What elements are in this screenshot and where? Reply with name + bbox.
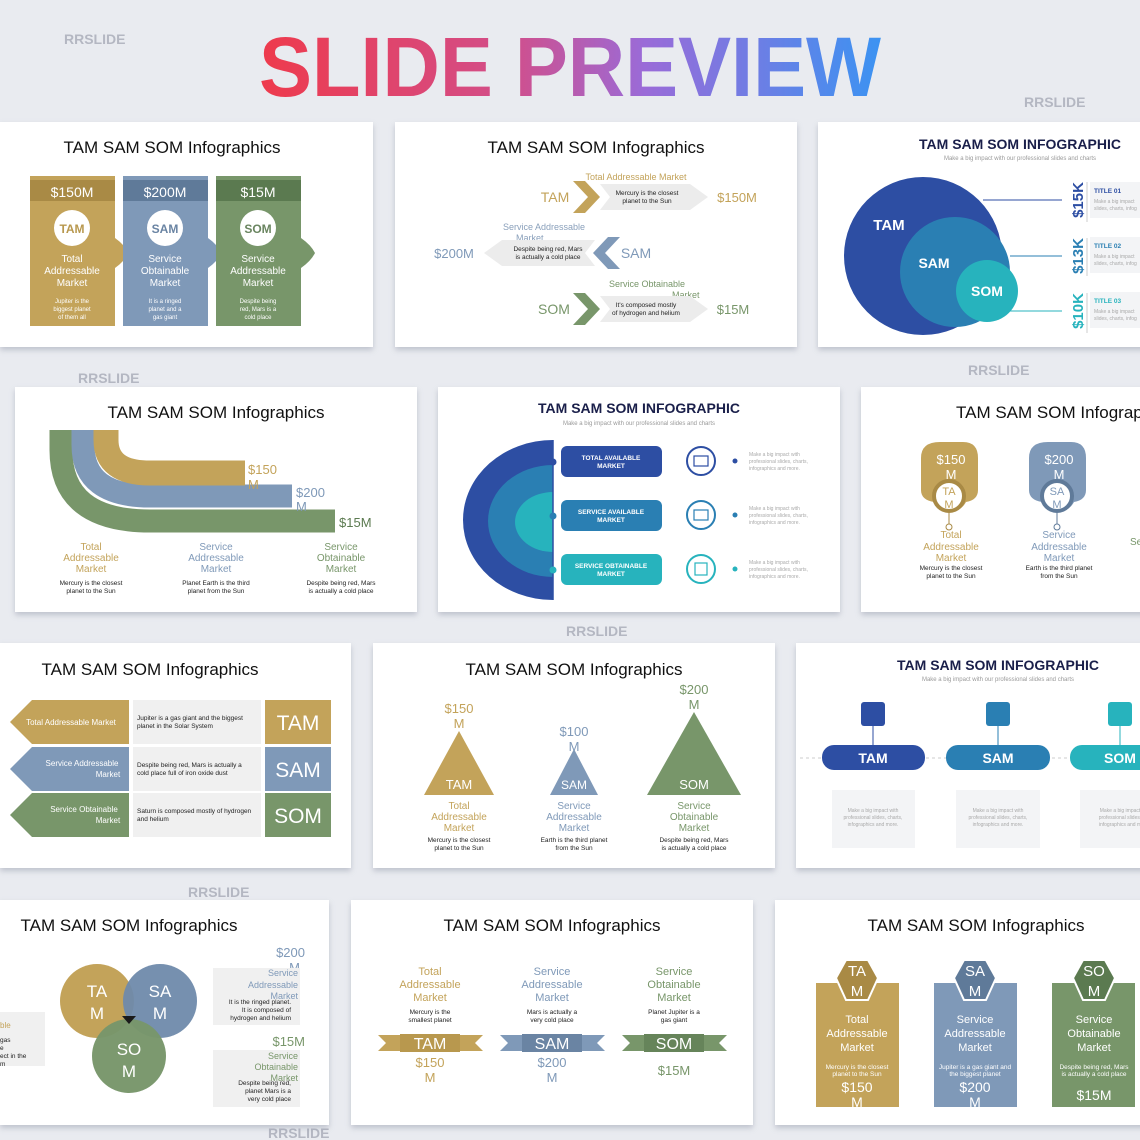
panel: slide 4 curved bands: $15M xyxy=(339,515,372,530)
panel: slide 3 circles xyxy=(818,122,1140,347)
panel: slide 9 pills: infographics and m xyxy=(1099,822,1140,828)
pin gold: Market xyxy=(936,553,967,564)
row TAM: $150M xyxy=(717,190,757,205)
panel: slide 10 venn: Service xyxy=(268,968,298,978)
pin gold xyxy=(920,442,983,580)
panel: slide 4 curved bands: planet from the Sun xyxy=(188,588,245,595)
panel: slide 3 circles: Make a big impact with our professional slides and charts xyxy=(944,156,1096,162)
SAM column: $200M xyxy=(144,184,186,200)
watermarks: RRSLIDE xyxy=(566,623,627,639)
SAM column xyxy=(123,176,221,326)
panel: slide 10 venn: hydrogen and helium xyxy=(230,1015,291,1022)
panel: slide 11 ribbons: M xyxy=(425,1070,435,1085)
SOM column: cold place xyxy=(244,315,272,321)
panel: slide 5 half circles: professional slides, charts, xyxy=(749,459,808,465)
TAM column: of them all xyxy=(58,315,86,321)
panel: slide 8 triangles: $100 xyxy=(560,724,588,739)
watermarks: RRSLIDE xyxy=(64,31,125,47)
panel: slide 4 curved bands: Service xyxy=(324,542,358,553)
panel: slide 11 ribbons: Market xyxy=(535,992,569,1004)
panel: slide 6 pins: TAM SAM SOM Infograp xyxy=(956,403,1140,422)
panel: slide 12 hexagon cards: SA xyxy=(965,963,985,980)
panel: slide 12 hexagon cards: $15M xyxy=(1076,1087,1112,1103)
panel: slide 10 venn: $15M xyxy=(272,1034,305,1049)
TAM column: Market xyxy=(57,278,88,289)
panel: slide 11 ribbons xyxy=(351,900,753,1125)
panel: slide 4 curved bands: M xyxy=(296,499,307,514)
panel: slide 11 ribbons: Planet Jupiter is a xyxy=(648,1009,700,1016)
row SAM xyxy=(434,222,651,269)
panel: slide 11 ribbons: SAM xyxy=(535,1036,569,1053)
panel: slide 6 pins xyxy=(861,387,1140,612)
panel: slide 10 venn: SA xyxy=(149,982,172,1001)
row SOM: $15M xyxy=(717,302,749,317)
panel: slide 11 ribbons: Mars is actually a xyxy=(527,1009,577,1016)
SAM column: Market xyxy=(150,278,181,289)
panel: slide 5 half circles: Make a big impact with xyxy=(749,452,800,458)
panel: slide 12 hexagon cards: Jupiter is a gas giant and xyxy=(939,1064,1012,1071)
TAM column: biggest planet xyxy=(53,307,91,313)
panel: slide 4 curved bands: Obtainable xyxy=(317,553,366,564)
panel: slide 12 hexagon cards xyxy=(775,900,1140,1125)
panel: slide 8 triangles: M xyxy=(569,739,579,754)
panel: slide 11 ribbons: TAM SAM SOM Infographics xyxy=(444,916,660,935)
panel: slide 9 pills: TAM xyxy=(858,750,888,766)
panel: slide 7 arrow rows: Total Addressable Market xyxy=(26,718,117,727)
panel: slide 12 hexagon cards: Market xyxy=(840,1042,874,1054)
panel: slide 3 circles: TITLE 03 xyxy=(1094,298,1121,305)
panel: slide 10 venn: ect in the xyxy=(0,1053,27,1060)
panel: slide 7 arrow rows: Market xyxy=(96,816,121,825)
panel: slide 5 half circles: professional slides, charts, xyxy=(749,567,808,573)
panel: slide 12 hexagon cards: Service xyxy=(957,1014,993,1026)
panel: slide 11 ribbons: smallest planet xyxy=(408,1017,452,1024)
pin blue: $200 xyxy=(1045,452,1073,467)
panel: slide 12 hexagon cards: M xyxy=(969,1094,981,1110)
panel: slide 10 venn: M xyxy=(90,1004,104,1023)
panel: slide 12 hexagon cards: Addressable xyxy=(944,1028,1006,1040)
values: $15K xyxy=(1070,182,1087,218)
panel: slide 9 pills: professional slides, xyxy=(1099,815,1140,821)
pin gold: $150 xyxy=(937,452,965,467)
panel: slide 5 half circles: professional slides, charts, xyxy=(749,513,808,519)
panel: slide 12 hexagon cards: Obtainable xyxy=(1067,1028,1121,1040)
panel: slide 3 circles: TITLE 01 xyxy=(1094,188,1121,195)
panel: slide 8 triangles: Obtainable xyxy=(670,812,719,823)
panel: slide 11 ribbons: TAM xyxy=(414,1036,446,1053)
row SAM: is actually a cold place xyxy=(515,254,581,261)
row SAM: Market xyxy=(516,233,544,243)
SOM column: Despite being xyxy=(240,299,276,305)
panel: slide 12 hexagon cards: $200 xyxy=(959,1079,991,1095)
panel: slide 10 venn: M xyxy=(289,960,300,975)
pin gold: M xyxy=(944,499,954,511)
panel: slide 11 ribbons: SOM xyxy=(656,1036,692,1053)
TAM column: Jupiter is the xyxy=(55,299,90,305)
panel: slide 8 triangles: Service xyxy=(557,801,591,812)
panel: slide 8 triangles: Total xyxy=(448,801,470,812)
panel: slide 10 venn: $200 xyxy=(276,945,305,960)
panel: slide 12 hexagon cards: $150 xyxy=(841,1079,873,1095)
watermarks: RRSLIDE xyxy=(968,362,1029,378)
panel: slide 12 hexagon cards: Addressable xyxy=(826,1028,888,1040)
panel: slide 12 hexagon cards: is actually a cold place xyxy=(1061,1071,1127,1078)
SOM column: Service xyxy=(241,254,275,265)
panel: slide 3 circles: TITLE 02 xyxy=(1094,243,1121,250)
panel: slide 12 hexagon cards: TA xyxy=(848,963,866,980)
panel: slide 5 half circles xyxy=(438,387,840,612)
panel: slide 4 curved bands xyxy=(15,387,417,612)
panel: slide 7 arrow rows: SAM xyxy=(275,759,321,782)
panel: slide 9 pills: Make a big impact xyxy=(1100,808,1140,814)
panel: slide 8 triangles: Earth is the third planet xyxy=(541,837,608,844)
panel: slide 8 triangles: TAM SAM SOM Infographics xyxy=(466,660,682,679)
panel: slide 10 venn: m xyxy=(0,1061,5,1068)
panel: slide 10 venn: planet Mars is a xyxy=(245,1088,291,1095)
buttons: TOTAL AVAILABLE xyxy=(582,455,641,462)
panel: slide 10 venn: e xyxy=(0,1045,4,1052)
TAM column: $150M xyxy=(51,184,93,200)
panel: slide 10 venn: ble xyxy=(0,1021,11,1030)
panel: slide 10 venn: Despite being red, xyxy=(238,1080,291,1087)
panel: slide 5 half circles: Make a big impact with xyxy=(749,560,800,566)
panel: slide 7 arrow rows: and helium xyxy=(137,816,169,823)
panel: slide 10 venn: SO xyxy=(117,1040,141,1059)
panel: slide 7 arrow rows: Service Addressable xyxy=(46,759,119,768)
panel: slide 8 triangles: from the Sun xyxy=(555,845,593,852)
panel: slide 7 arrow rows: Market xyxy=(96,770,121,779)
panel: slide 4 curved bands: Total xyxy=(80,542,102,553)
panel: slide 12 hexagon cards: Mercury is the closest xyxy=(826,1064,889,1071)
pin gold: M xyxy=(946,467,956,482)
pin gold: Addressable xyxy=(923,542,979,553)
panel: slide 4 curved bands: is actually a cold place xyxy=(308,588,374,595)
panel: slide 10 venn: Obtainable xyxy=(254,1062,298,1072)
panel: slide 9 pills: SOM xyxy=(1104,750,1136,766)
panel: slide 11 ribbons: gas giant xyxy=(661,1017,687,1024)
panel: slide 11 ribbons: Obtainable xyxy=(647,979,701,991)
panel: slide 4 curved bands: Service xyxy=(199,542,233,553)
buttons: SERVICE AVAILABLE xyxy=(578,509,645,516)
pin blue: M xyxy=(1052,499,1062,511)
panel: slide 4 curved bands: Market xyxy=(326,564,357,575)
pin gold: TA xyxy=(942,486,956,498)
nested circles: TAM xyxy=(873,217,905,234)
panel: slide 8 triangles: is actually a cold place xyxy=(661,845,727,852)
pin blue: from the Sun xyxy=(1040,573,1078,580)
panel: slide 12 hexagon cards: Despite being red, Mars xyxy=(1059,1064,1129,1071)
panel: slide 8 triangles: M xyxy=(689,697,699,712)
panel: slide 8 triangles: Mercury is the closest xyxy=(428,837,491,844)
panel: slide 3 circles: slides, charts, infog xyxy=(1094,206,1137,212)
panel: slide 9 pills: infographics and more. xyxy=(973,822,1023,828)
SOM column: SOM xyxy=(244,222,272,236)
nested circles xyxy=(844,177,1018,335)
SOM column xyxy=(216,176,315,326)
panel: slide 9 pills: TAM SAM SOM INFOGRAPHIC xyxy=(897,657,1099,673)
panel: slide 7 arrow rows: TAM SAM SOM Infographics xyxy=(42,660,258,679)
panel: slide 10 venn: Addressable xyxy=(248,980,298,990)
panel: slide 4 curved bands: Market xyxy=(76,564,107,575)
panel: slide 4 curved bands: $200 xyxy=(296,485,325,500)
panel: slide 12 hexagon cards: M xyxy=(851,983,863,1000)
row SAM: Service Addressable xyxy=(503,222,585,232)
buttons: SERVICE OBTAINABLE xyxy=(575,563,648,570)
pin blue: Service xyxy=(1042,530,1076,541)
row TAM xyxy=(541,172,757,213)
panel: slide 7 arrow rows: SOM xyxy=(274,805,322,828)
panel: slide 5 half circles: TAM SAM SOM INFOGRAPHIC xyxy=(538,400,740,416)
panel: slide 10 venn: very cold place xyxy=(248,1096,291,1103)
panel: slide 11 ribbons: Service xyxy=(534,966,570,978)
values xyxy=(1070,182,1087,329)
TAM column: Addressable xyxy=(44,266,100,277)
panel: slide 12 hexagon cards: TAM SAM SOM Infographics xyxy=(868,916,1084,935)
panel: slide 11 ribbons: very cold place xyxy=(530,1017,574,1024)
nested circles: SAM xyxy=(918,255,950,271)
panel: slide 3 circles: TAM SAM SOM INFOGRAPHIC xyxy=(919,136,1121,152)
panel: slide 4 curved bands: Addressable xyxy=(63,553,119,564)
pin blue: Addressable xyxy=(1031,542,1087,553)
pin blue: Earth is the third planet xyxy=(1026,565,1093,572)
pin blue: Market xyxy=(1044,553,1075,564)
panel: slide 8 triangles: $200 xyxy=(680,682,708,697)
panel: slide 2 arrows xyxy=(395,122,797,347)
panel: slide 12 hexagon cards: planet to the Sun xyxy=(832,1071,882,1078)
TAM column: TAM xyxy=(59,222,85,236)
panel: slide 7 arrow rows: planet in the Solar System xyxy=(137,723,213,730)
panel: slide 5 half circles: infographics and more. xyxy=(749,520,800,526)
panel: slide 11 ribbons: Mercury is the xyxy=(410,1009,451,1016)
panel: slide 4 curved bands: planet to the Sun xyxy=(66,588,116,595)
icons xyxy=(687,447,715,583)
panel: slide 4 curved bands: Planet Earth is the third xyxy=(182,580,250,587)
title: SLIDE PREVIEW xyxy=(259,20,882,114)
panel: slide 8 triangles: Despite being red, Mars xyxy=(659,837,729,844)
panel: slide 11 ribbons: Market xyxy=(413,992,447,1004)
panel: slide 8 triangles: Market xyxy=(444,823,475,834)
panel: slide 8 triangles: Addressable xyxy=(546,812,602,823)
row SOM: SOM xyxy=(538,301,570,317)
panel: slide 8 triangles: Service xyxy=(677,801,711,812)
panel: slide 11 ribbons: $15M xyxy=(658,1063,690,1078)
panel: slide 12 hexagon cards: M xyxy=(851,1094,863,1110)
panel: slide 9 pills: infographics and more. xyxy=(848,822,898,828)
pin blue: M xyxy=(1054,467,1064,482)
panel: slide 12 hexagon cards: M xyxy=(1088,983,1100,1000)
panel: slide 1 columns xyxy=(0,122,373,347)
panel: slide 4 curved bands: TAM SAM SOM Infographics xyxy=(108,403,324,422)
panel: slide 9 pills: professional slides, charts, xyxy=(969,815,1027,821)
panel: slide 8 triangles: planet to the Sun xyxy=(434,845,484,852)
panel: slide 7 arrow rows xyxy=(0,643,351,868)
panel: slide 8 triangles: Market xyxy=(559,823,590,834)
panel: slide 4 curved bands: M xyxy=(248,477,259,492)
panel: slide 11 ribbons: Addressable xyxy=(521,979,583,991)
panel: slide 4 curved bands: Despite being red, Mars xyxy=(306,580,376,587)
panel: slide 10 venn xyxy=(0,900,329,1125)
panel: slide 8 triangles xyxy=(373,643,775,868)
values: $13K xyxy=(1070,238,1087,274)
panel: slide 7 arrow rows: Service Obtainable xyxy=(50,805,118,814)
panel: slide 8 triangles: Addressable xyxy=(431,812,487,823)
panel: slide 12 hexagon cards: the biggest planet xyxy=(949,1071,1001,1078)
row SAM: SAM xyxy=(621,245,651,261)
panel: slide 4 curved bands: Addressable xyxy=(188,553,244,564)
TAM column: Total xyxy=(61,254,83,265)
TAM column xyxy=(30,176,128,326)
row SOM: Service Obtainable xyxy=(609,279,685,289)
panel: slide 3 circles: slides, charts, infog xyxy=(1094,316,1137,322)
row SOM: It's composed mostly xyxy=(616,302,677,309)
SAM column: Obtainable xyxy=(141,266,190,277)
SAM column: Service xyxy=(148,254,182,265)
panel: slide 8 triangles: Market xyxy=(679,823,710,834)
pin gold: Mercury is the closest xyxy=(920,565,983,572)
SOM column: $15M xyxy=(240,184,276,200)
panel: slide 11 ribbons: Total xyxy=(418,966,442,978)
panel: slide 1 columns: TAM SAM SOM Infographics xyxy=(64,138,280,157)
panel: slide 8 triangles: SOM xyxy=(679,777,709,792)
panel: slide 10 venn: M xyxy=(153,1004,167,1023)
watermarks: RRSLIDE xyxy=(188,884,249,900)
panel: slide 5 half circles: infographics and more. xyxy=(749,466,800,472)
panel: slide 8 triangles: M xyxy=(454,716,464,731)
SAM column: gas giant xyxy=(153,315,178,321)
row SOM xyxy=(538,279,749,325)
panel: slide 12 hexagon cards: Market xyxy=(958,1042,992,1054)
panel: slide 11 ribbons: $150 xyxy=(416,1055,444,1070)
panel: slide 10 venn: Market xyxy=(270,1073,298,1083)
panel: slide 4 curved bands: Market xyxy=(201,564,232,575)
panel: slide 4 curved bands: Mercury is the closest xyxy=(60,580,123,587)
panel: slide 2 arrows: TAM SAM SOM Infographics xyxy=(488,138,704,157)
panel: slide 7 arrow rows: Saturn is composed mostly of hydrogen xyxy=(137,808,252,815)
panel: slide 9 pills: Make a big impact with our professional slides and charts xyxy=(922,677,1074,683)
panel: slide 11 ribbons: $200 xyxy=(538,1055,566,1070)
pin blue xyxy=(1026,442,1093,580)
row TAM: TAM xyxy=(541,189,569,205)
panel: slide 7 arrow rows: Jupiter is a gas giant and the biggest xyxy=(137,715,243,722)
row TAM: planet to the Sun xyxy=(622,198,672,205)
panel: slide 10 venn: TA xyxy=(87,982,108,1001)
panel: slide 10 venn: It is composed of xyxy=(242,1007,291,1014)
row SAM: $200M xyxy=(434,246,474,261)
pin gold: planet to the Sun xyxy=(926,573,976,580)
buttons xyxy=(561,446,662,585)
SAM column: SAM xyxy=(152,222,178,236)
panel: slide 12 hexagon cards: Total xyxy=(845,1014,869,1026)
panel: slide 10 venn: gas xyxy=(0,1037,11,1044)
SOM column: Addressable xyxy=(230,266,286,277)
watermarks: RRSLIDE xyxy=(78,370,139,386)
panel: slide 11 ribbons: Addressable xyxy=(399,979,461,991)
row SAM: Despite being red, Mars xyxy=(513,246,583,253)
panel: slide 8 triangles: TAM xyxy=(446,777,472,792)
row SOM: of hydrogen and helium xyxy=(612,310,680,317)
panel: slide 9 pills: professional slides, charts, xyxy=(844,815,902,821)
panel: slide 5 half circles: Make a big impact with xyxy=(749,506,800,512)
SOM column: Market xyxy=(243,278,274,289)
panel: slide 3 circles: slides, charts, infog xyxy=(1094,261,1137,267)
panel: slide 9 pills: Make a big impact with xyxy=(973,808,1024,814)
panel: slide 10 venn: Service xyxy=(268,1051,298,1061)
row SOM: Market xyxy=(672,290,700,300)
panel: slide 3 circles: Make a big impact xyxy=(1094,254,1135,260)
panel: slide 5 half circles: Make a big impact with our professional slides and charts xyxy=(563,421,715,427)
values: $10K xyxy=(1070,293,1087,329)
panel: slide 5 half circles: infographics and more. xyxy=(749,574,800,580)
panel: slide 4 curved bands: $150 xyxy=(248,462,277,477)
SAM column: It is a ringed xyxy=(149,299,181,305)
panel: slide 12 hexagon cards: Market xyxy=(1077,1042,1111,1054)
panel: slide 12 hexagon cards: SO xyxy=(1083,963,1105,980)
panel: slide 7 arrow rows: TAM xyxy=(277,712,319,735)
panel: slide 9 pills: SAM xyxy=(982,750,1014,766)
panel: slide 12 hexagon cards: M xyxy=(969,983,981,1000)
panel: slide 10 venn: M xyxy=(122,1062,136,1081)
panel: slide 9 pills xyxy=(796,643,1140,868)
row TAM: Total Addressable Market xyxy=(585,172,687,182)
buttons: MARKET xyxy=(597,517,625,524)
panel: slide 10 venn: Market xyxy=(270,991,298,1001)
panel: slide 10 venn: It is the ringed planet. xyxy=(229,999,291,1006)
panel: slide 3 circles: Make a big impact xyxy=(1094,199,1135,205)
panel: slide 12 hexagon cards: Service xyxy=(1076,1014,1112,1026)
nested circles: SOM xyxy=(971,283,1003,299)
buttons: MARKET xyxy=(597,571,625,578)
panel: slide 11 ribbons: Service xyxy=(656,966,692,978)
pin blue: SA xyxy=(1050,486,1065,498)
panel: slide 11 ribbons: Market xyxy=(657,992,691,1004)
watermarks: RRSLIDE xyxy=(1024,94,1085,110)
panel: slide 11 ribbons: M xyxy=(547,1070,557,1085)
pin gold: Total xyxy=(940,530,962,541)
panel: slide 3 circles: Make a big impact xyxy=(1094,309,1135,315)
panel: slide 7 arrow rows: cold place full of iron oxide dust xyxy=(137,770,228,777)
SAM column: planet and a xyxy=(148,307,182,313)
row TAM: Mercury is the closest xyxy=(616,190,679,197)
panel: slide 7 arrow rows: Despite being red, Mars is actually a xyxy=(137,762,242,769)
panel: slide 8 triangles: SAM xyxy=(561,778,587,792)
panel: slide 10 venn: TAM SAM SOM Infographics xyxy=(21,916,237,935)
buttons: MARKET xyxy=(597,463,625,470)
panel: slide 8 triangles: $150 xyxy=(445,701,473,716)
panel: slide 9 pills: Make a big impact with xyxy=(848,808,899,814)
SOM column: red, Mars is a xyxy=(240,307,277,313)
